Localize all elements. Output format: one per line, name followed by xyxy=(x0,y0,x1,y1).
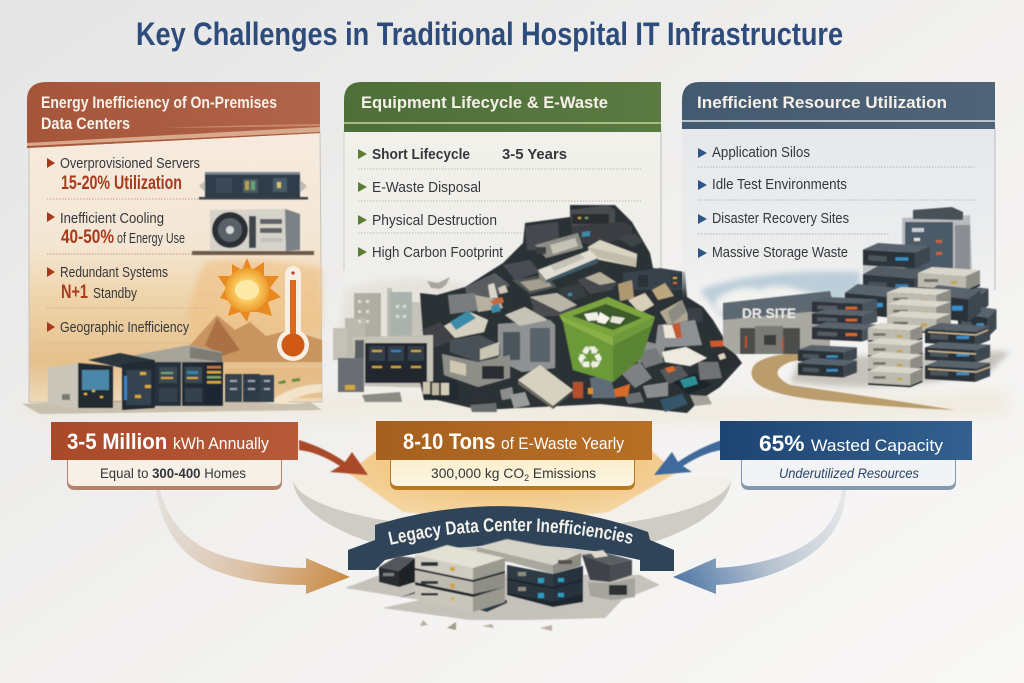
panel header: Data Centers xyxy=(41,114,130,133)
illustration: road xyxy=(752,350,955,410)
panel: equipment lifecycle and e-waste xyxy=(333,82,742,413)
row: overprovisioned servers: 15-20% Utilization xyxy=(61,173,182,194)
panel header: Energy Inefficiency of On-Premises xyxy=(41,93,277,112)
row: inefficient cooling xyxy=(47,210,185,248)
e-waste: dark server block xyxy=(442,335,510,387)
row: redundant systems xyxy=(47,264,168,303)
row: geographic inefficiency: Geographic Inefficiency xyxy=(60,319,189,336)
central banner xyxy=(348,506,674,571)
stat sub-card: Underutilized Resources xyxy=(779,465,919,481)
stat card: wasted capacity: 65% Wasted Capacity xyxy=(759,431,944,456)
row: inefficient cooling: of Energy Use xyxy=(117,230,185,247)
panel header: Equipment Lifecycle & E-Waste xyxy=(361,93,608,112)
illustration: sky and clouds xyxy=(700,271,860,315)
central server: dark stack xyxy=(477,539,583,607)
e-waste: keyboard box xyxy=(538,250,598,283)
stat card: e-waste xyxy=(376,421,652,490)
central server: light stack xyxy=(415,545,505,612)
stat card: energy xyxy=(51,422,298,490)
icon: green recycling bin xyxy=(559,297,655,382)
illustration: e-waste pile xyxy=(338,205,742,413)
item: application silos: Application Silos xyxy=(712,144,810,161)
curved arrow: left to center xyxy=(156,490,350,594)
icon: cooling unit xyxy=(192,209,314,255)
item: disaster recovery sites: Disaster Recovery Sites xyxy=(712,210,849,227)
stat sub-card: Emissions xyxy=(529,465,596,481)
panel header xyxy=(344,82,661,132)
stat card: e-waste: 8-10 Tons of E-Waste Yearly xyxy=(403,429,624,454)
icon: sun xyxy=(218,258,281,322)
stat sub-card: 300,000 kg CO xyxy=(431,465,525,481)
sandy ground xyxy=(20,390,1010,424)
row: overprovisioned servers xyxy=(47,155,200,194)
illustration: server stacks xyxy=(790,207,1010,387)
stat sub-card: Equal to 300-400 Homes xyxy=(100,465,246,481)
stat sub-card xyxy=(741,458,956,490)
e-waste: data center block xyxy=(338,335,433,392)
icon: thermometer xyxy=(277,266,309,361)
row: overprovisioned servers: Overprovisioned Servers xyxy=(60,155,200,172)
stat card: energy: 3-5 Million kWh Annually xyxy=(67,429,269,454)
stat sub-card: 2 xyxy=(524,473,529,483)
row: redundant systems: Standby xyxy=(93,285,137,302)
item: short lifecycle: 3-5 Years xyxy=(502,146,567,163)
icon: green recycling bin: ♻ xyxy=(576,339,604,377)
central servers xyxy=(345,539,660,631)
stat sub-card xyxy=(67,458,282,490)
stat sub-card xyxy=(390,458,635,490)
item: massive storage waste: Massive Storage Waste xyxy=(712,244,848,261)
item: physical destruction: Physical Destruction xyxy=(372,212,497,229)
e-waste: grey server xyxy=(535,233,583,258)
panel body xyxy=(344,130,661,295)
row: inefficient cooling: Inefficient Cooling xyxy=(60,210,164,227)
arrow: capacity stat to center xyxy=(654,440,722,475)
item: short lifecycle: Short Lifecycle xyxy=(372,146,470,163)
row: redundant systems: Redundant Systems xyxy=(60,264,168,281)
panel: energy inefficiency xyxy=(22,82,322,414)
central server: left dark box xyxy=(379,556,415,587)
item: high carbon footprint: High Carbon Footprint xyxy=(372,244,504,261)
illustration: data center buildings xyxy=(22,345,322,414)
row: inefficient cooling: 40-50% xyxy=(61,227,114,248)
e-waste: grey flat box xyxy=(530,293,577,317)
e-waste: right racks xyxy=(623,268,685,290)
curved arrow: right to center xyxy=(673,490,846,594)
panel header xyxy=(682,82,995,129)
item: e-waste disposal: E-Waste Disposal xyxy=(372,179,481,196)
e-waste: dark server top xyxy=(570,205,615,228)
debris: right side xyxy=(655,320,702,348)
illustration: city skyline xyxy=(333,277,470,360)
panel header xyxy=(27,82,320,148)
arrow: energy stat to center xyxy=(299,440,368,475)
central banner: Legacy Data Center Inefficiencies xyxy=(388,518,633,545)
illustration: DR site building xyxy=(723,291,835,354)
e-waste: beige server xyxy=(588,240,637,267)
illustration: DR site building: DR SITE xyxy=(742,305,796,321)
storage: cabinet tower xyxy=(902,207,972,272)
debris: upper left xyxy=(503,260,540,280)
row: redundant systems: N+1 xyxy=(61,282,88,303)
panel: inefficient resource utilization xyxy=(682,82,1010,410)
panel body xyxy=(29,130,322,402)
e-waste: building block xyxy=(498,307,555,372)
stat card: wasted capacity xyxy=(720,421,972,490)
title: Key Challenges in Traditional Hospital IT Infrastructure xyxy=(136,16,843,52)
item: short lifecycle xyxy=(358,146,567,163)
central platform disc xyxy=(293,440,731,562)
central server: printer xyxy=(582,550,635,600)
item: idle test environments: Idle Test Environments xyxy=(712,176,847,193)
icon: rack server xyxy=(199,172,308,200)
panel body xyxy=(682,128,995,298)
scene: desert, sun, mountains xyxy=(189,260,322,405)
e-waste: cream device xyxy=(518,365,573,409)
panel header: Inefficient Resource Utilization xyxy=(697,93,947,112)
